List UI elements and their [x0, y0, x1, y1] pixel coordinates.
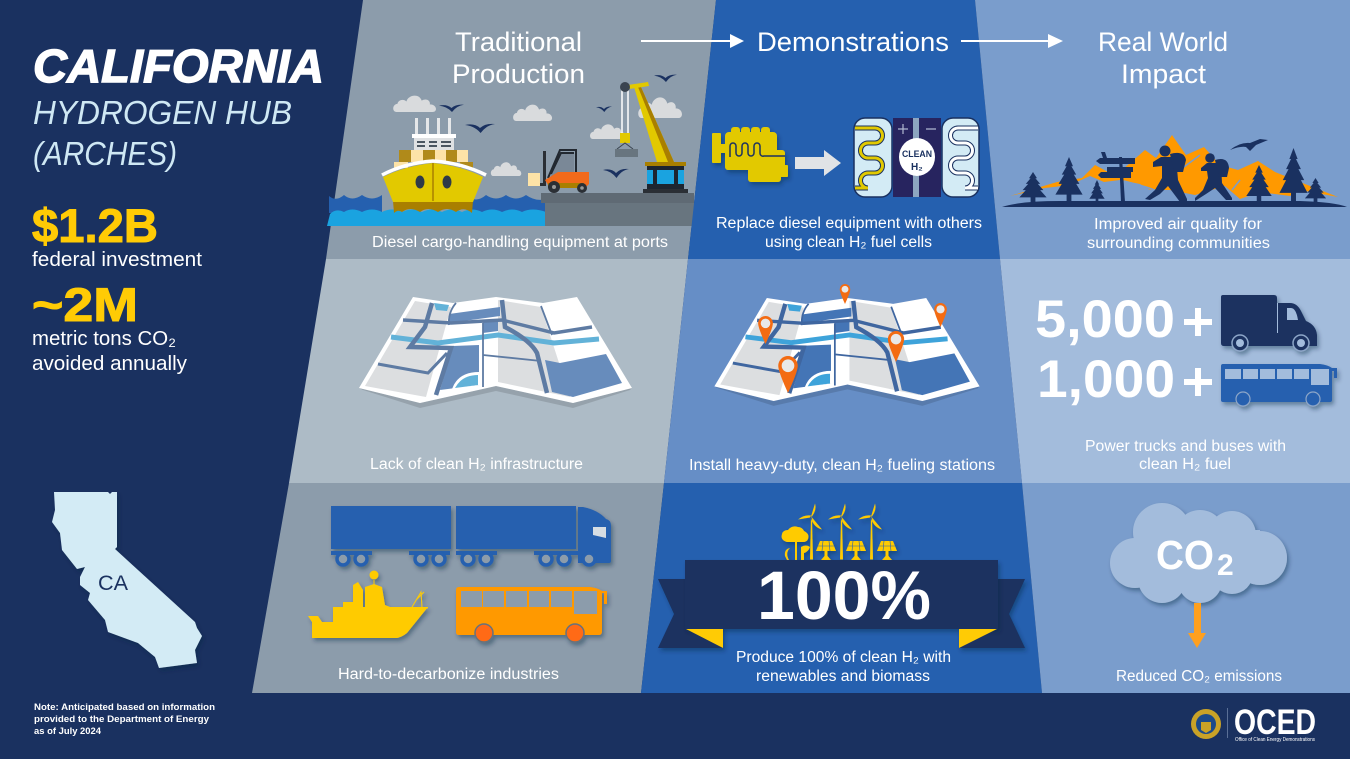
- panel: diesel cargo handling at ports: [326, 0, 716, 259]
- caption: renewables and biomass: [756, 668, 930, 685]
- stat: federal investment: $1.2B: [32, 199, 158, 252]
- panel: install fueling stations: [664, 259, 1022, 483]
- logo: OCED: Office of Clean Energy Demonstrations: [1235, 737, 1315, 743]
- icon: fuel cell: [854, 118, 979, 197]
- caption: Produce 100% of clean H₂ with: [736, 649, 951, 666]
- icon: CO2 cloud: [1110, 503, 1287, 603]
- caption: [716, 215, 982, 251]
- heading: Real World Impact: Impact: [1121, 59, 1207, 89]
- title: HYDROGEN HUB: [33, 94, 292, 131]
- panel: power trucks and buses: [1000, 259, 1350, 483]
- icon: fuel cell: CLEAN: [902, 149, 932, 160]
- note: as of July 2024: [34, 726, 102, 737]
- map: California: CA: [98, 572, 128, 595]
- caption: Install heavy-duty, clean H₂ fueling stations: [689, 457, 995, 474]
- heading: Real World Impact: [1098, 27, 1228, 89]
- icon: ship: [308, 570, 428, 638]
- heading: Traditional Production: [452, 27, 585, 89]
- heading: Traditional Production: Traditional: [455, 27, 582, 57]
- heading: Traditional Production: Production: [452, 59, 585, 89]
- panel: lack of infrastructure: [289, 259, 688, 483]
- caption: Reduced CO₂ emissions: [1116, 668, 1282, 685]
- panel: hard to decarbonize: [252, 483, 664, 693]
- note: Note: Anticipated based on information: [34, 702, 215, 713]
- caption: [1085, 438, 1286, 473]
- icon: truck: [1221, 295, 1317, 351]
- arrow: down: [1188, 603, 1206, 648]
- stat: CO2 avoided: avoided annually: [32, 353, 187, 375]
- logo: OCED: OCED: [1234, 703, 1316, 742]
- panel: produce 100% clean H2: [641, 483, 1042, 693]
- stat: buses: [1037, 350, 1337, 409]
- stat: trucks: [1035, 290, 1317, 351]
- caption: Power trucks and buses with: [1085, 438, 1286, 455]
- caption: Lack of clean H₂ infrastructure: [370, 456, 583, 473]
- heading: Demonstrations: Demonstrations: [757, 27, 949, 57]
- caption: Replace diesel equipment with others: [716, 215, 982, 232]
- heading: Real World Impact: Real World: [1098, 27, 1228, 57]
- caption: using clean H₂ fuel cells: [765, 234, 932, 251]
- logo: OCED: [1191, 703, 1316, 743]
- caption: surrounding communities: [1087, 235, 1270, 252]
- caption: [1087, 216, 1270, 252]
- left sidebar: [32, 40, 324, 737]
- icon: port scene: [327, 75, 694, 226]
- arrow: production to demonstrations: [641, 34, 744, 48]
- stat: CO2 avoided: ~2M: [32, 278, 138, 331]
- ribbon banner: [658, 557, 1025, 648]
- caption: clean H₂ fuel: [1139, 456, 1231, 473]
- icon: map: [359, 297, 632, 408]
- stat: CO2 avoided: metric tons CO₂: [32, 328, 176, 350]
- icon: map with pins: [714, 284, 980, 406]
- stat: buses: 1,000: [1037, 350, 1175, 409]
- arrow: engine to fuel cell: [795, 150, 841, 176]
- icon: bus: [1221, 364, 1337, 406]
- icon: hikers and mountains: [1002, 135, 1347, 207]
- caption: Improved air quality for: [1094, 216, 1262, 233]
- stat: 100%: 100%: [757, 557, 931, 634]
- caption: [736, 649, 951, 685]
- icon: renewables: [782, 504, 897, 560]
- title: (ARCHES): [33, 135, 177, 172]
- caption: Diesel cargo-handling equipment at ports: [372, 234, 668, 251]
- map: California: [52, 492, 202, 668]
- icon: CO2 cloud: 2: [1217, 549, 1234, 582]
- icon: engine: [712, 127, 788, 182]
- icon: fuel cell: H₂: [911, 162, 923, 173]
- panel: improved air quality: [975, 0, 1350, 259]
- stat: federal investment: federal investment: [32, 249, 202, 271]
- stat: trucks: 5,000: [1035, 290, 1175, 349]
- icon: semi truck: [331, 506, 611, 565]
- arrow: demonstrations to impact: [961, 34, 1063, 48]
- stat: CO2 avoided: [32, 278, 187, 375]
- note: provided to the Department of Energy: [34, 714, 210, 725]
- caption: Hard-to-decarbonize industries: [338, 666, 559, 683]
- stat: federal investment: [32, 199, 202, 271]
- title: CALIFORNIA: [33, 40, 324, 92]
- icon: bus: [456, 587, 607, 642]
- title: [33, 40, 324, 172]
- panel: reduced CO2: [1022, 483, 1350, 693]
- icon: CO2 cloud: CO: [1156, 532, 1214, 578]
- panel: replace diesel equipment: [688, 0, 1000, 259]
- note: [34, 702, 215, 737]
